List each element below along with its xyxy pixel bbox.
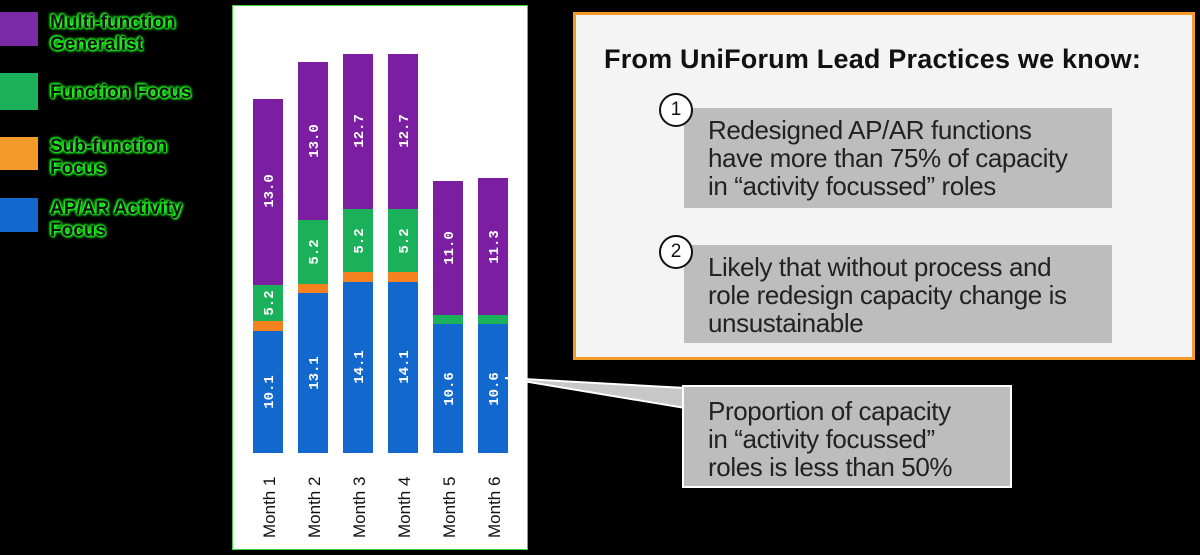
point 2 box: unsustainable <box>708 308 863 338</box>
point 1 box: Redesigned AP/AR functions <box>708 115 1031 145</box>
bar month 4: 5.2 <box>397 228 413 254</box>
bar month 6: 10.6 <box>487 372 503 406</box>
panel: lead practices <box>573 12 1195 360</box>
bar month 3 <box>343 54 373 453</box>
legend item: purple <box>0 12 38 46</box>
legend text: generalist: Multi-function <box>50 12 176 33</box>
x axis labels: Month 3 <box>350 477 369 538</box>
x axis labels <box>260 477 504 538</box>
x axis labels: Month 6 <box>485 477 504 538</box>
icon: number 2 <box>659 235 693 269</box>
callout: in “activity focussed” <box>708 424 935 454</box>
point 1 box: in “activity focussed” roles <box>708 171 996 201</box>
callout: roles is less than 50% <box>708 452 952 482</box>
legend text: generalist: Generalist <box>50 34 143 55</box>
legend <box>0 10 194 241</box>
legend text: sub-function: Focus <box>50 158 106 179</box>
callout: Proportion of capacity <box>708 396 951 426</box>
bar month 1: 5.2 <box>262 290 278 316</box>
bar month 5 <box>433 181 463 453</box>
stacked bar chart <box>253 54 508 538</box>
bar month 4: 14.1 <box>397 350 413 384</box>
icon: number 1 <box>659 93 693 127</box>
x axis labels: Month 1 <box>260 477 279 538</box>
legend text: sub-function <box>48 134 170 179</box>
heading: From UniForum Lead Practices we know: <box>604 44 1141 74</box>
legend text: activity: Focus <box>50 220 106 241</box>
x axis labels: Month 2 <box>305 477 324 538</box>
bar month 1: 10.1 <box>262 375 278 409</box>
legend item: green <box>0 73 38 110</box>
bar month 6 <box>478 178 508 453</box>
bar month 1: 13.0 <box>262 174 278 208</box>
x axis labels: Month 5 <box>440 477 459 538</box>
point 2 box <box>684 245 1112 343</box>
point 1 box: have more than 75% of capacity <box>708 143 1067 173</box>
bar month 2 <box>298 62 328 453</box>
point 2 box: Likely that without process and <box>708 252 1051 282</box>
point 1 box <box>684 108 1112 208</box>
bar month 4: 12.7 <box>397 114 413 148</box>
legend text: sub-function: Sub-function <box>50 136 167 157</box>
legend text: generalist <box>47 10 178 55</box>
bar month 2: 13.0 <box>307 124 323 158</box>
icon: number 1: 1 <box>671 99 681 120</box>
point 2 box: role redesign capacity change is <box>708 280 1067 310</box>
bar month 5: 10.6 <box>442 372 458 406</box>
chart panel <box>232 5 528 550</box>
bar month 3: 12.7 <box>352 114 368 148</box>
legend item: blue <box>0 198 38 232</box>
bar month 3: 5.2 <box>352 228 368 254</box>
icon: number 2: 2 <box>671 241 681 262</box>
bar month 6: 11.3 <box>487 230 503 264</box>
x axis labels: Month 4 <box>395 477 414 538</box>
bar month 3: 14.1 <box>352 350 368 384</box>
legend text: activity: AP/AR Activity <box>50 198 182 219</box>
bar month 4 <box>388 54 418 453</box>
legend text: function focus: Function Focus <box>50 82 191 103</box>
bar month 5: 11.0 <box>442 231 458 265</box>
legend item: orange <box>0 137 38 170</box>
arrow: callout pointer <box>504 377 682 408</box>
bar month 2: 13.1 <box>307 356 323 390</box>
legend text: activity <box>48 196 186 241</box>
bar month 2: 5.2 <box>307 239 323 265</box>
bar month 1 <box>253 99 283 453</box>
callout <box>682 385 1012 488</box>
